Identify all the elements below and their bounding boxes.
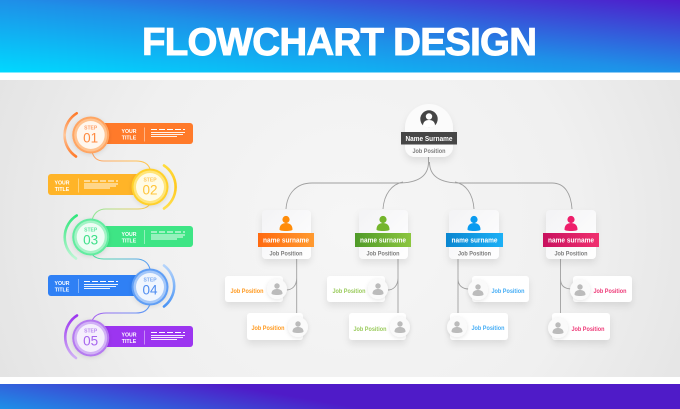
step 04: 04 [142, 282, 158, 298]
card: blue manager: name surname [452, 236, 498, 244]
card: pink manager [543, 210, 599, 259]
icon: orange person [280, 216, 292, 231]
step list [48, 113, 193, 358]
sub card: pink 1: Job Position [594, 288, 626, 295]
step 01: STEP [84, 126, 98, 132]
icon: pink person [564, 216, 578, 231]
step 05: TITLE [122, 339, 137, 345]
step 05: STEP [84, 328, 98, 334]
card: orange manager [258, 210, 314, 259]
sub card: blue 1: Job Position [492, 288, 524, 295]
step 04 [48, 266, 174, 306]
icon: blue person [468, 216, 480, 231]
root card: Job Position [412, 148, 446, 155]
sub card: blue 2 [447, 313, 508, 340]
sub card: pink 2 [548, 313, 610, 340]
step 04: YOUR [54, 281, 70, 287]
sub card: orange 2: Job Position [252, 325, 284, 332]
title: FLOWCHART DESIGN [142, 21, 537, 64]
step 01: YOUR [122, 129, 137, 135]
sub card: green 2 [349, 313, 410, 340]
sub card: green 2: Job Position [354, 326, 386, 333]
card: orange manager: name surname [263, 236, 309, 244]
step 03: YOUR [122, 232, 137, 238]
step 02: TITLE [55, 187, 70, 193]
step 02 [48, 166, 176, 208]
sub card: pink 1 [570, 276, 632, 302]
step 02: 02 [142, 182, 158, 198]
root card: Name Surname [406, 134, 452, 143]
sub card: green 1 [327, 276, 388, 302]
step 03 [65, 216, 193, 258]
step 01: TITLE [122, 136, 137, 142]
card: green manager: name surname [360, 236, 406, 244]
sub card: orange 2 [247, 313, 308, 340]
card: pink manager: Job Position [554, 250, 588, 258]
step 03: TITLE [122, 238, 137, 244]
icon: root avatar [420, 110, 438, 128]
sub card: blue 1 [468, 276, 529, 302]
card: orange manager: Job Position [270, 250, 303, 258]
sub card: orange 1 [225, 276, 287, 302]
card: blue manager [446, 210, 503, 259]
step 01: 01 [83, 130, 98, 146]
footer banner [0, 384, 680, 409]
card: pink manager: name surname [548, 236, 594, 244]
step connectors [92, 152, 150, 321]
card: green manager: Job Position [366, 250, 400, 258]
step 04: TITLE [55, 288, 70, 294]
step 05: 05 [83, 334, 98, 348]
step 04: STEP [143, 278, 157, 284]
step 02: STEP [143, 178, 157, 184]
sub card: green 1: Job Position [332, 288, 366, 295]
sub card: blue 2: Job Position [472, 325, 504, 332]
root card [401, 104, 457, 157]
card: green manager [355, 210, 411, 259]
step 03: STEP [84, 228, 98, 234]
main panel background [0, 80, 680, 377]
icon: green person [376, 216, 390, 231]
step 02: YOUR [54, 180, 70, 186]
sub card: pink 2: Job Position [572, 326, 604, 333]
step 01 [65, 113, 193, 156]
step 05 [65, 316, 193, 358]
org chart connectors [286, 157, 572, 315]
card: blue manager: Job Position [458, 250, 491, 258]
header banner [0, 0, 680, 72]
step 03: 03 [83, 232, 98, 248]
sub card: orange 1: Job Position [230, 288, 264, 295]
step 05: YOUR [122, 332, 137, 338]
